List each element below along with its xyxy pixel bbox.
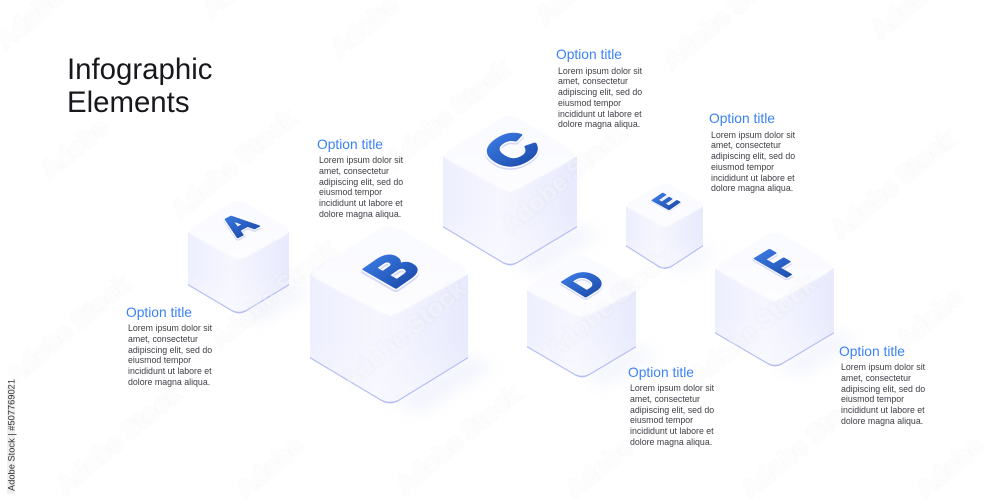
text block: option A: amet, consectetur (128, 334, 198, 344)
letter B: B (351, 245, 433, 295)
title: Infographic (67, 53, 212, 86)
watermarks: Adobe Stock (826, 125, 961, 245)
text block: option C: Option title (556, 47, 622, 62)
text block: option D: amet, consectetur (630, 394, 700, 404)
text block: option E: amet, consectetur (711, 140, 781, 150)
text block: option D: dolore magna aliqua. (630, 437, 712, 447)
cube C (443, 116, 600, 274)
text block: option E: incididunt ut labore et (711, 173, 795, 183)
text block: option D: Option title (628, 365, 694, 380)
text block: option C: amet, consectetur (558, 76, 628, 86)
letter A: A (212, 210, 266, 244)
letter C: C (470, 124, 553, 180)
watermarks: Adobe (891, 283, 969, 355)
cube D (527, 256, 658, 386)
text block: option B (317, 137, 404, 219)
text block: option F (839, 344, 926, 426)
text block: option E: dolore magna aliqua. (711, 183, 793, 193)
text block: option F: Option title (839, 344, 905, 359)
letter D: D (554, 266, 616, 304)
text block: option F: adipiscing elit, sed do (841, 384, 925, 394)
letter C: C (470, 123, 553, 179)
text block: option C: adipiscing elit, sed do (558, 87, 642, 97)
letter F: F (744, 244, 812, 284)
text block: option F: Lorem ipsum dolor sit (841, 362, 926, 372)
text block: option A: adipiscing elit, sed do (128, 345, 212, 355)
cube A (188, 202, 312, 322)
cube E (626, 184, 720, 274)
text block: option C (556, 47, 643, 129)
watermarks over cubes: Adobe Stock (541, 245, 676, 365)
text block: option B: incididunt ut labore et (319, 198, 403, 208)
stock id label: Adobe Stock | #507769021 (6, 379, 16, 491)
text block: option A: Option title (126, 305, 192, 320)
watermarks: Adobe Stock (391, 380, 526, 499)
text block: option F: eiusmod tempor (841, 394, 904, 404)
text block: option C: Lorem ipsum dolor sit (558, 66, 643, 76)
watermarks over cubes (206, 55, 821, 395)
text block: option B: eiusmod tempor (319, 187, 382, 197)
text block: option D: adipiscing elit, sed do (630, 405, 714, 415)
text block: option B: adipiscing elit, sed do (319, 177, 403, 187)
text block: option E: Option title (709, 111, 775, 126)
text block: option A: dolore magna aliqua. (128, 377, 210, 387)
text block: option B: Option title (317, 137, 383, 152)
text block: option E: Lorem ipsum dolor sit (711, 130, 796, 140)
letter F: F (744, 246, 812, 286)
letter E: E (647, 190, 686, 214)
text block: option A: incididunt ut labore et (128, 366, 212, 376)
watermarks: Adobe Stock (51, 380, 186, 499)
watermarks over cubes: Adobe Stock (496, 120, 631, 240)
watermarks over cubes: Adobe Stock (206, 235, 341, 355)
watermarks over cubes: Adobe Stock (686, 270, 821, 390)
title: Elements (67, 86, 190, 119)
text block: option B: dolore magna aliqua. (319, 209, 401, 219)
text block: option C: dolore magna aliqua. (558, 119, 640, 129)
watermarks: Adobe Stock (1, 270, 136, 390)
title (67, 53, 212, 119)
text block: option A (126, 305, 213, 387)
text block: option F: amet, consectetur (841, 373, 911, 383)
letter D: D (554, 265, 616, 303)
text block: option F: dolore magna aliqua. (841, 416, 923, 426)
cube B (310, 226, 495, 412)
text block: option E: eiusmod tempor (711, 162, 774, 172)
cube F (715, 233, 858, 376)
text block: option B: amet, consectetur (319, 166, 389, 176)
letter B: B (351, 247, 433, 298)
letter A: A (212, 208, 266, 242)
text block: option A: Lorem ipsum dolor sit (128, 323, 213, 333)
text block: option B: Lorem ipsum dolor sit (319, 155, 404, 165)
watermarks over cubes: Adobe Stock (336, 275, 471, 395)
watermarks over cubes: Adobe Stock (381, 55, 516, 175)
text block: option E (709, 111, 796, 193)
letter B: B (351, 245, 433, 295)
text block: option D: Lorem ipsum dolor sit (630, 383, 715, 393)
text block: option C: eiusmod tempor (558, 98, 621, 108)
text block: option E: adipiscing elit, sed do (711, 151, 795, 161)
letter E: E (647, 190, 686, 214)
watermarks: Adobe (36, 113, 114, 185)
letter D: D (554, 264, 616, 303)
text block: option C: incididunt ut labore et (558, 109, 642, 119)
letter C: C (470, 122, 553, 178)
letter E: E (647, 191, 686, 215)
letter F: F (744, 244, 812, 284)
text block: option A: eiusmod tempor (128, 355, 191, 365)
watermarks: Adobe Stock (166, 105, 301, 225)
text block: option D (628, 365, 715, 447)
text block: option F: incididunt ut labore et (841, 405, 925, 415)
text block: option D: eiusmod tempor (630, 415, 693, 425)
letter A: A (212, 208, 266, 243)
text block: option D: incididunt ut labore et (630, 426, 714, 436)
